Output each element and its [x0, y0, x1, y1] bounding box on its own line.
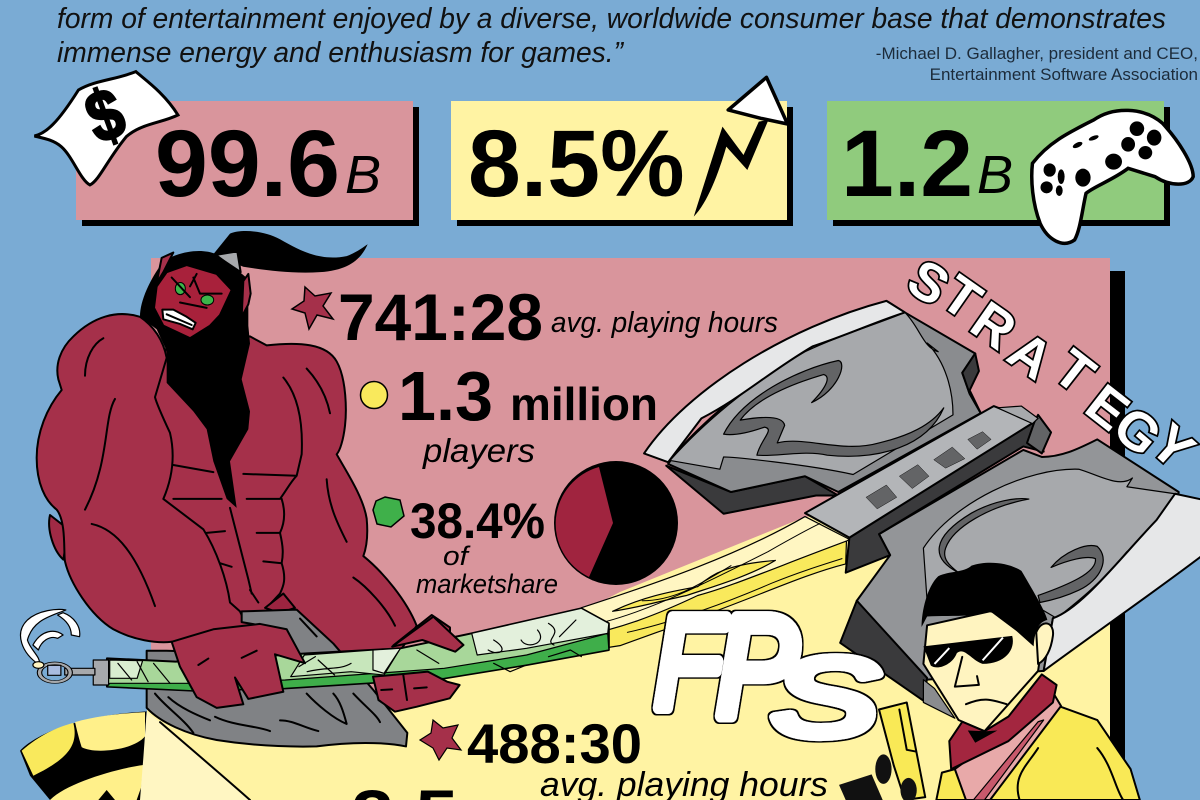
stat: FPS playing hours	[420, 712, 828, 800]
icon: rising arrow	[694, 77, 788, 217]
stat: FPS playing hours: 488:30	[467, 712, 642, 775]
stat: strategy players	[360, 357, 658, 469]
left blade underside	[666, 466, 838, 514]
grey cloth	[147, 610, 407, 747]
left blade body	[668, 301, 981, 492]
icon: dollar bill: $	[76, 73, 135, 160]
icon: red star	[292, 287, 333, 329]
stat: strategy players: million	[510, 378, 658, 430]
face	[154, 265, 232, 338]
stat card: 8.5% growth: 8.5%	[468, 111, 685, 217]
heading: STRATEGY: A	[997, 320, 1064, 392]
quote text: immense energy and enthusiasm for games.”	[57, 37, 624, 69]
jacket	[936, 706, 1140, 800]
handle: cream shaft	[581, 517, 849, 652]
heading: STRATEGY	[897, 248, 1200, 481]
sunglasses	[923, 636, 1013, 667]
white claws	[21, 609, 66, 665]
muscle lines	[85, 338, 395, 626]
stat: strategy marketshare	[373, 493, 558, 599]
upper right hand	[393, 615, 450, 647]
dark green strip	[107, 633, 609, 691]
pale patches	[472, 608, 609, 655]
pie chart: 38.4% marketshare	[554, 461, 678, 585]
right arm and torso	[150, 336, 417, 661]
left blade swirl	[724, 360, 944, 456]
character: FPS man with sunglasses	[839, 563, 1140, 800]
gloved hand	[839, 754, 917, 800]
stat: strategy marketshare: of	[443, 541, 471, 571]
stat card: 99.6B revenue: B	[345, 145, 381, 205]
lower bevel	[840, 601, 927, 701]
right blade centre	[923, 469, 1175, 618]
heading: FPS: F	[654, 588, 727, 736]
gun	[879, 702, 925, 800]
panel: strategy background	[151, 258, 1125, 800]
stat: strategy playing hours	[292, 280, 778, 354]
left blade bright edge	[644, 301, 905, 462]
cream scale belly	[140, 712, 250, 800]
right blade bright edge	[1044, 494, 1200, 671]
quote attribution	[876, 44, 1198, 84]
stat: strategy players: players	[422, 432, 535, 469]
quote attribution: -Michael D. Gallagher, president and CEO,	[876, 44, 1198, 63]
demon right fist	[373, 617, 463, 712]
panel: FPS background	[147, 500, 1110, 800]
face and neck	[923, 611, 1044, 731]
ponytail	[213, 231, 368, 273]
heading: STRATEGY: T	[931, 264, 992, 332]
icon: game controller	[1032, 110, 1193, 243]
stat card: 1.2B gamers: 1.2	[841, 111, 973, 217]
block buttons	[866, 432, 991, 509]
hair	[922, 563, 1047, 646]
ring	[39, 663, 70, 682]
hair band	[215, 251, 241, 272]
icon: red star	[420, 720, 461, 760]
heading: STRATEGY: G	[1102, 395, 1173, 468]
eyes	[175, 282, 185, 295]
left elbow bump	[49, 515, 68, 560]
quote text	[57, 3, 1166, 69]
pink collar	[955, 695, 1061, 800]
nose and mouth	[955, 657, 1007, 704]
stat: strategy playing hours: avg. playing hours	[551, 307, 778, 339]
stat: strategy players: 1.3	[398, 357, 493, 435]
icon: green heptagon	[373, 497, 404, 527]
stat: strategy marketshare: marketshare	[416, 569, 558, 599]
heading: STRATEGY: T	[1043, 338, 1106, 406]
stat card: 99.6B revenue	[76, 101, 419, 226]
metal collar	[93, 660, 109, 685]
heading: STRATEGY: E	[1075, 373, 1140, 443]
stat card: 99.6B revenue: 99.6	[155, 111, 340, 217]
stat: strategy playing hours: 741:28	[338, 280, 543, 354]
teeth	[162, 310, 196, 329]
giant battle axe	[644, 301, 1200, 718]
demon left hand over pole	[172, 624, 305, 708]
stat card: 1.2B gamers	[827, 101, 1170, 226]
stat: strategy marketshare: 38.4%	[410, 493, 545, 549]
left blade centre	[670, 312, 953, 474]
brows and nose	[172, 274, 222, 308]
quote attribution: Entertainment Software Association	[930, 65, 1198, 84]
axe head block	[846, 422, 1044, 573]
character: red demon	[37, 231, 450, 661]
icon: dollar bill	[34, 72, 178, 185]
bottom-left serpent coil	[20, 711, 250, 800]
left arm	[37, 314, 287, 651]
heading: FPS: S	[772, 636, 878, 759]
ear	[1036, 623, 1053, 664]
heading: FPS: P	[717, 588, 797, 747]
icon: yellow circle	[360, 382, 388, 408]
stat card: 1.2B gamers: B	[977, 145, 1013, 205]
beard and hair	[140, 251, 250, 508]
heading: STRATEGY: S	[897, 248, 960, 318]
quote text: form of entertainment enjoyed by a diverse, worldwide consumer base that demonstrates	[57, 3, 1166, 35]
ears	[157, 252, 173, 283]
heading: STRATEGY: R	[960, 290, 1027, 362]
right blade main	[857, 439, 1179, 680]
right blade swirls	[939, 499, 1029, 573]
heading: FPS	[654, 588, 878, 759]
groin shadow	[265, 594, 295, 613]
stat card: 8.5% growth	[451, 101, 793, 226]
handle: green pole with ring end	[21, 608, 609, 691]
scarf	[949, 674, 1057, 769]
